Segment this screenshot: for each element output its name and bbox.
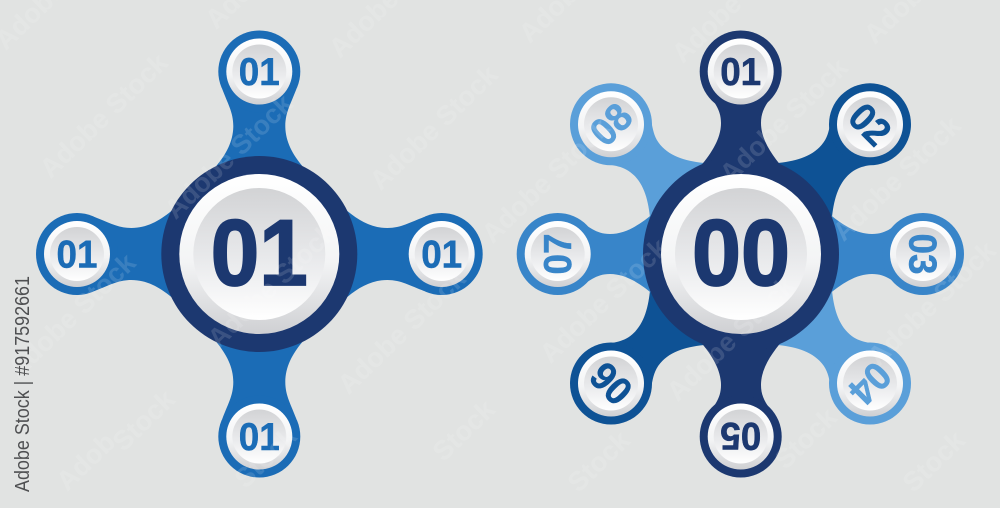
node: bottom 01 — [218, 396, 300, 478]
watermark: repeated Adobe Stock text: Adob — [51, 427, 121, 496]
node: 05 — [700, 396, 782, 478]
hub: centre 00: 00 — [692, 200, 790, 305]
node: right 01: 01 — [421, 234, 462, 276]
watermark: repeated Adobe Stock text: Adobe Stock — [332, 263, 472, 400]
node: 08: 08 — [582, 95, 641, 155]
diagram: right eight-arm 00 — [517, 30, 964, 478]
node: 08 — [570, 83, 652, 165]
watermark: repeated Adobe Stock text: Adobe Stock — [364, 59, 504, 196]
watermark: repeated Adobe Stock text: Adobe Stock — [476, 112, 616, 249]
node: top 01: 01 — [239, 51, 280, 94]
credit: vertical stock id: Adobe Stock | #917592661 — [12, 276, 34, 492]
node: right 01 — [401, 213, 483, 295]
arm: four blue connectors — [94, 89, 424, 419]
diagram: left four-arm 01 — [36, 30, 483, 478]
node: 07 — [517, 213, 599, 295]
node: left 01 — [36, 213, 118, 295]
watermark: repeated Adobe Stock text: Adobe Stock — [534, 232, 674, 369]
node: 01: 01 — [720, 51, 761, 94]
arms: medium blue horizontals — [576, 212, 906, 296]
node: bottom 01: 01 — [239, 416, 280, 459]
watermark: repeated Adobe Stock text: Stock — [769, 402, 843, 475]
node: 02 — [829, 83, 911, 165]
watermark: repeated Adobe Stock text: Stock — [427, 394, 501, 467]
watermark: repeated Adobe Stock text: Adobe Stock — [827, 110, 967, 247]
node: 03 — [882, 213, 964, 295]
watermark: repeated Adobe Stock text: Adobe Stock — [862, 235, 1000, 372]
node: 04: 04 — [839, 353, 899, 413]
watermark: repeated Adobe Stock text: Stock — [229, 421, 303, 494]
watermark: repeated Adobe Stock text: Stock — [897, 425, 971, 498]
node: 06: 06 — [582, 353, 641, 412]
hub: centre 01: 01 — [211, 200, 308, 305]
node: left 01: 01 — [56, 234, 98, 276]
node: 07: 07 — [537, 234, 580, 274]
watermark: repeated Adobe Stock text: Adobe Stock — [34, 47, 174, 184]
watermark: repeated Adobe Stock text: Stock — [562, 425, 636, 498]
arms: navy verticals — [699, 89, 783, 419]
watermark: repeated Adobe Stock text: Adobe Stock — [202, 217, 342, 354]
watermark: repeated Adobe Stock text: Adobe Stock — [2, 247, 142, 384]
node: 01 — [700, 30, 782, 112]
watermark: repeated Adobe Stock text: Adobe Stock — [159, 88, 299, 225]
arms: light blue diagonals — [595, 108, 887, 400]
node: 02: 02 — [840, 95, 899, 155]
watermark: repeated Adobe Stock text: Adobe Stock — [661, 270, 801, 407]
node: 03: 03 — [900, 234, 944, 274]
node: 06 — [570, 342, 652, 424]
watermark: repeated Adobe Stock text: Stock — [107, 384, 181, 457]
hub: centre 01 — [161, 156, 357, 352]
node: 05: 05 — [720, 414, 761, 457]
watermark: repeated Adobe Stock text: Adobe Stock — [714, 52, 854, 189]
node: top 01 — [218, 30, 300, 112]
hub: centre 00 — [643, 156, 839, 352]
node: 04 — [829, 342, 911, 424]
arms: dark blue diagonals — [595, 108, 887, 400]
